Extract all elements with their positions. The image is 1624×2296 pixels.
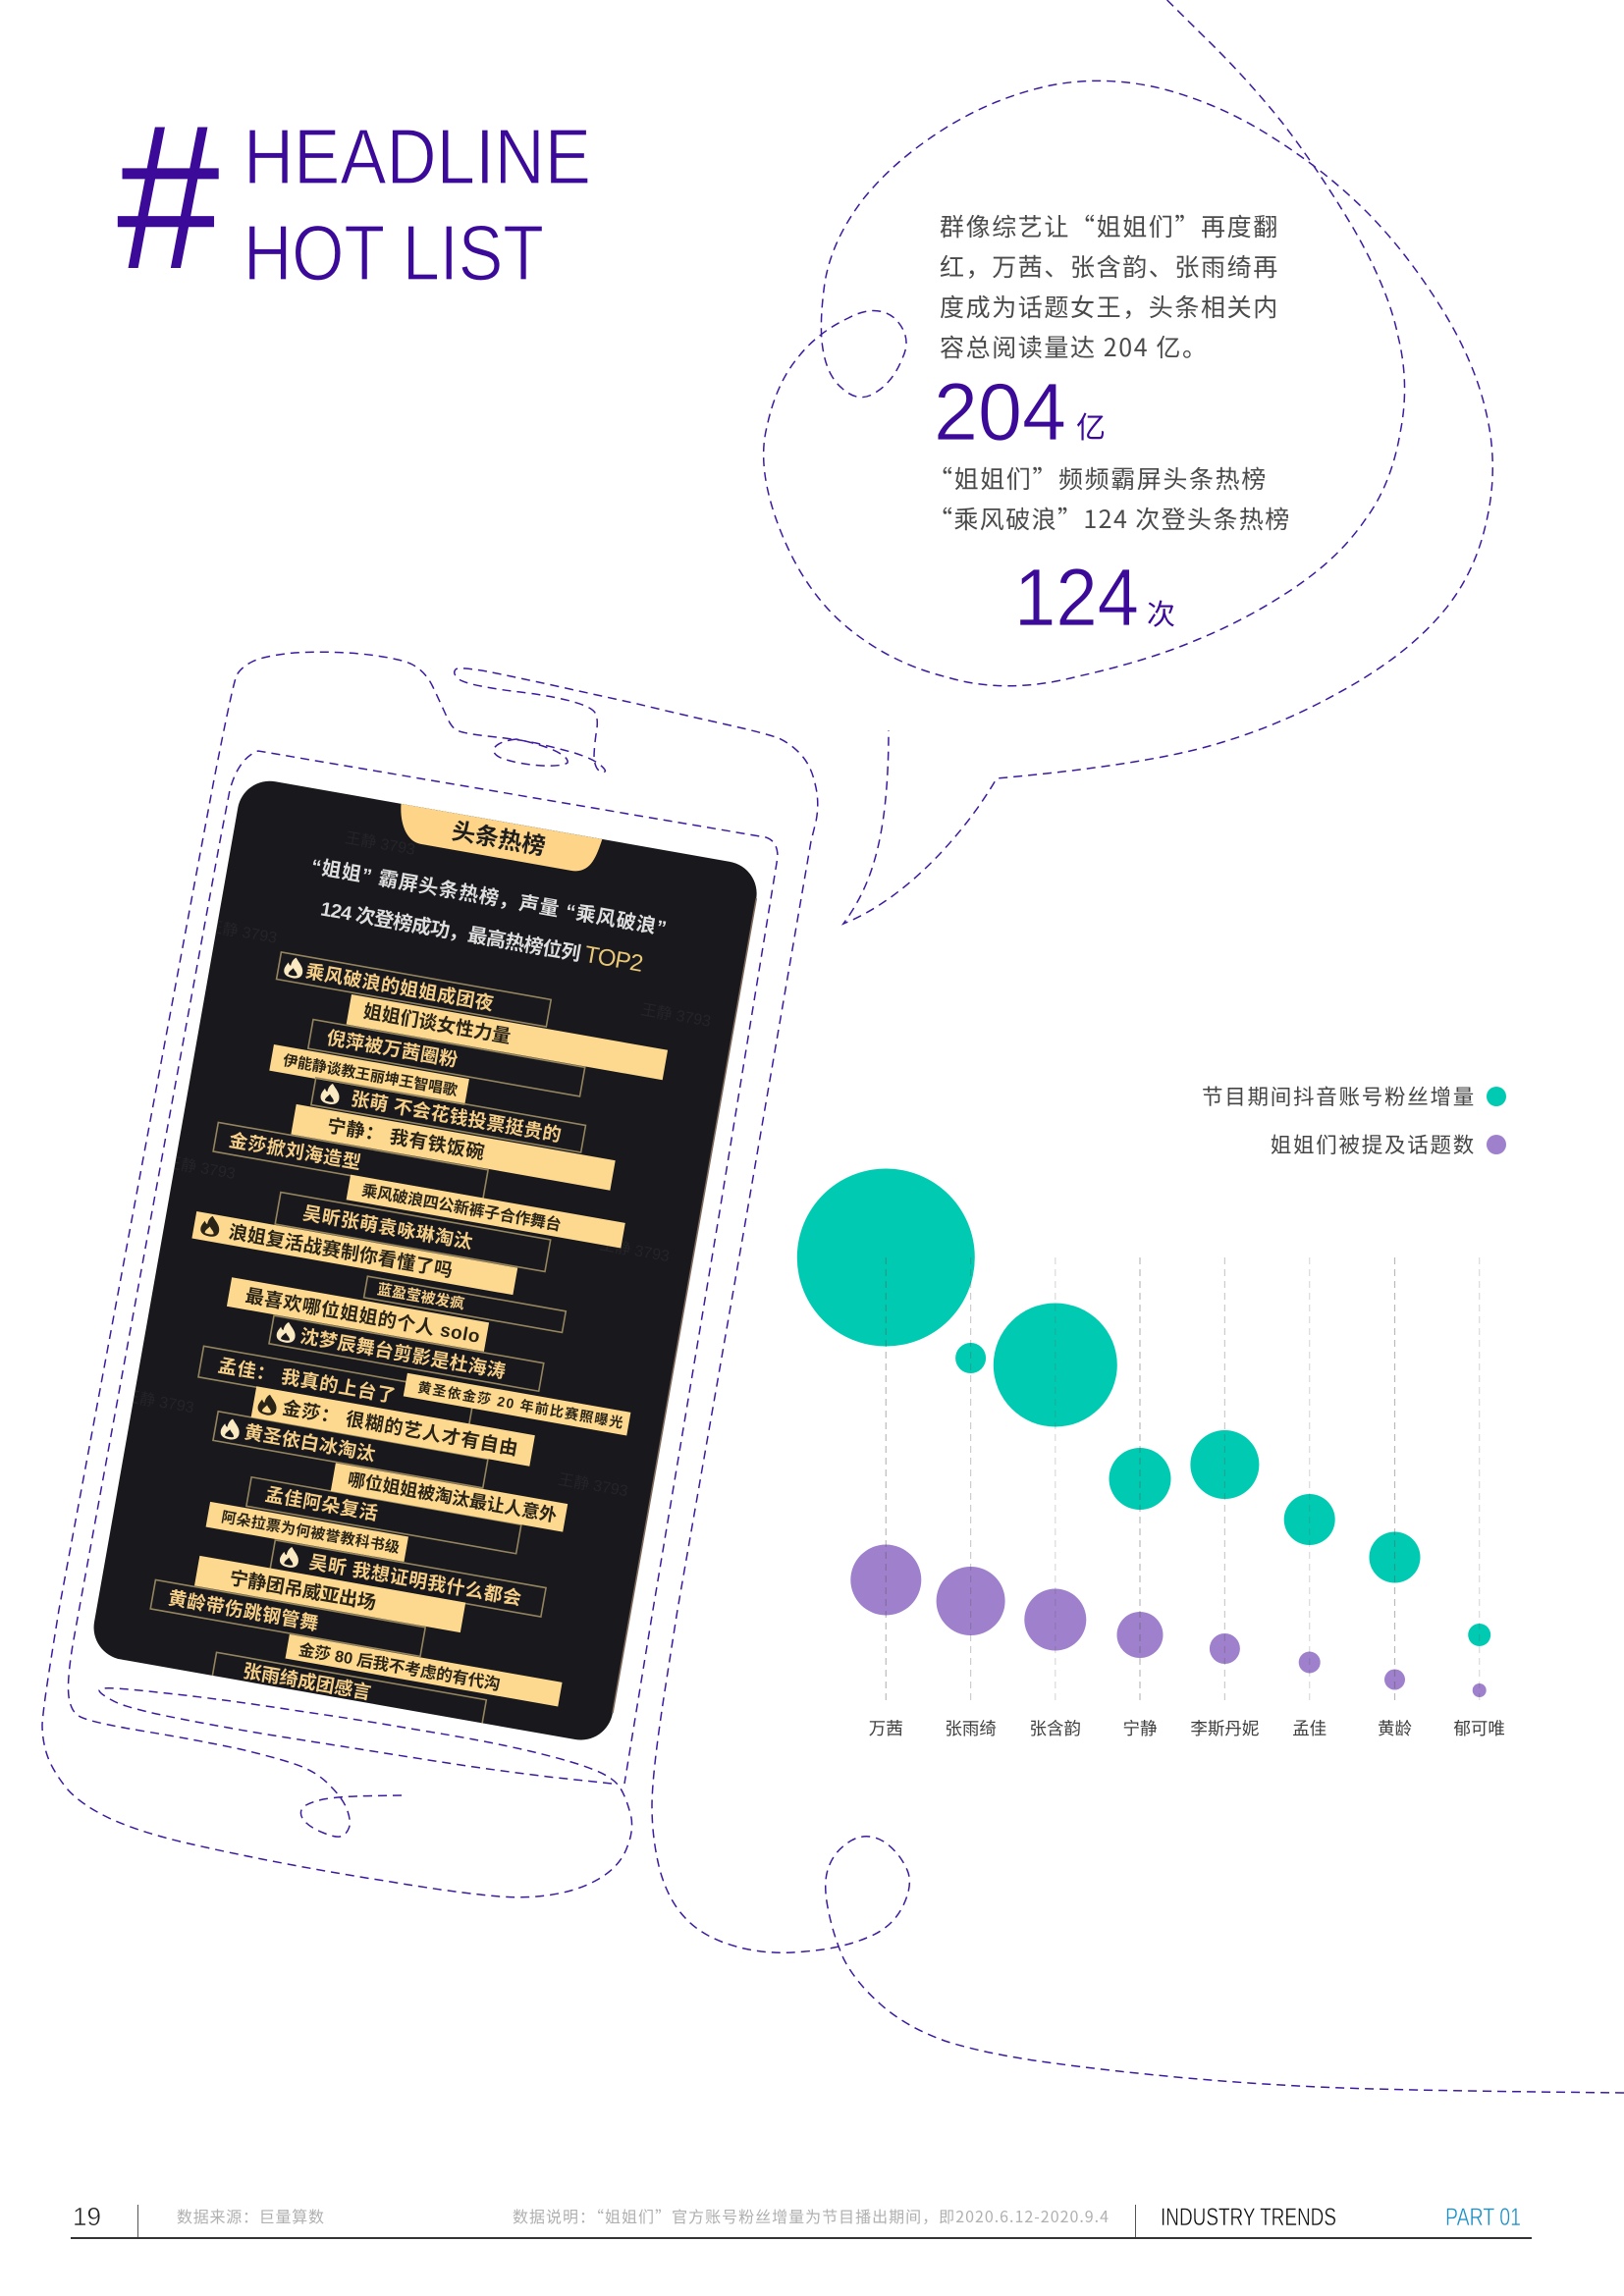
footer: 数据来源：巨量算数 (177, 2204, 324, 2227)
phone screen: headline hot list screenshot (77, 774, 762, 1761)
phone screen: headline hot list screenshot: 王静 3793 (205, 918, 278, 947)
hot list items: 金莎： 很糊的艺人才有自由 (281, 1396, 519, 1460)
phone screen: headline hot list screenshot: 王静 3793 (344, 829, 416, 859)
phone inner dashed outline (69, 751, 778, 1837)
hot list items: 阿朵拉票为何被誉教科书级 (220, 1508, 401, 1557)
footer (71, 2202, 1532, 2239)
text block: intro (940, 208, 1279, 364)
phone screen: headline hot list screenshot: 王静 3793 (598, 1236, 671, 1265)
text block: intro: 度成为话题女王，头条相关内 (940, 289, 1279, 324)
hot list items: 姐姐们谈女性力量 (361, 1000, 513, 1048)
phone speaker dashed loop (494, 739, 568, 766)
tab: 头条热榜 (395, 804, 602, 875)
hot list items (149, 951, 668, 1724)
hot list items: 吴昕张萌袁咏琳淘汰 (301, 1202, 474, 1254)
footer: INDUSTRY TRENDS (1161, 2204, 1336, 2231)
subtitle: “姐姐” 霸屏头条热榜，声量 “乘风破浪” (309, 854, 669, 939)
hot list items: 黄圣依金莎 20 年前比赛照曝光 (416, 1379, 624, 1430)
name labels: 宁静 (1123, 1716, 1157, 1740)
name labels: 孟佳 (1292, 1716, 1326, 1740)
hot list items: 哪位姐姐被淘汰最让人意外 (346, 1468, 559, 1525)
stat: 204 亿: 204 (934, 366, 1066, 457)
stat: 124 次: 次 (1147, 592, 1175, 633)
name labels: 张雨绮 (945, 1716, 997, 1740)
phone screen: headline hot list screenshot: 王静 3793 (639, 1001, 712, 1031)
tab: 头条热榜: 头条热榜 (450, 818, 547, 861)
name labels (869, 1716, 1505, 1740)
hot list items: 宁静： 我有铁饭碗 (326, 1114, 486, 1164)
hot list items: 张萌 不会花钱投票挺贵的 (350, 1089, 563, 1147)
hot list items: 金莎 80 后我不考虑的有代沟 (298, 1639, 502, 1694)
hot list items: 乘风破浪的姐姐成团夜 (303, 960, 496, 1015)
title: HEADLINE HOT LIST (244, 113, 591, 296)
phone screen: headline hot list screenshot: 王静 3793 (557, 1470, 629, 1500)
phone screen: headline hot list screenshot: 王静 3793 (123, 1387, 195, 1416)
hot list items: 沈梦辰舞台剪影是杜海涛 (298, 1324, 508, 1383)
hot list items: 吴昕 我想证明我什么都会 (307, 1551, 523, 1610)
footer: 数据说明：“姐姐们”官方账号粉丝增量为节目播出期间，即2020.6.12-2020.9.4 (513, 2204, 1109, 2227)
hot list items: 金莎掀刘海造型 (227, 1129, 362, 1174)
phone screen: headline hot list screenshot: 王静 3793 (164, 1153, 237, 1183)
text block: intro: 容总阅读量达 204 亿。 (940, 329, 1209, 364)
hot list items: 倪萍被万茜圈粉 (325, 1026, 460, 1072)
hot list items: 伊能静谈教王丽坤王智唱歌 (282, 1051, 459, 1099)
legend: 节目期间抖音账号粉丝增量 (1202, 1081, 1476, 1111)
name labels: 黄龄 (1378, 1716, 1412, 1740)
title: HEADLINE HOT LIST: HOT LIST (244, 209, 544, 296)
name labels: 郁可唯 (1453, 1716, 1505, 1740)
hot list items: 乘风破浪四公新裤子合作舞台 (360, 1181, 563, 1234)
hot list items: 宁静团吊威亚出场 (228, 1567, 378, 1615)
teal bubbles: 抖音账号粉丝增量 (797, 1168, 1490, 1646)
text block: hot list (928, 460, 1291, 536)
name labels: 万茜 (869, 1716, 903, 1740)
name labels: 李斯丹妮 (1190, 1716, 1259, 1740)
hot list items: 蓝盈莹被发疯 (376, 1280, 466, 1313)
purple bubbles: 被提及话题数 (850, 1545, 1487, 1697)
text block: intro: 红，万茜、张含韵、张雨绮再 (940, 248, 1279, 284)
hot list items: 黄圣依白冰淘汰 (243, 1421, 377, 1466)
bubble chart (797, 1168, 1505, 1740)
footer: 19 (73, 2202, 101, 2231)
text block: hot list: “乘风破浪”124 次登头条热榜 (928, 501, 1291, 536)
title: HEADLINE HOT LIST: HEADLINE (244, 113, 591, 200)
hot list items: 浪姐复活战赛制你看懂了吗 (227, 1220, 455, 1282)
title: hash symbol: # (117, 83, 220, 312)
name labels: 张含韵 (1030, 1716, 1081, 1740)
stat: 124 次: 124 (1014, 552, 1139, 643)
legend: 姐姐们被提及话题数 (1271, 1129, 1476, 1159)
text block: intro: 群像综艺让“姐姐们”再度翻 (940, 208, 1279, 243)
hot list items: 黄龄带伤跳钢管舞 (167, 1586, 320, 1635)
subtitle: 124 次登榜成功，最高热榜位列 TOP2 (319, 894, 645, 978)
hot list items: 孟佳： 我真的上台了 (216, 1354, 398, 1408)
phone outer dashed outline (42, 652, 1624, 2093)
legend (1202, 1081, 1506, 1159)
hot list items: 张雨绮成团感言 (242, 1659, 373, 1704)
hot list items: 最喜欢哪位姐姐的个人 solo (244, 1284, 482, 1348)
speech bubble dashed outline (764, 0, 1492, 924)
text block: hot list: “姐姐们”频频霸屏头条热榜 (928, 460, 1268, 496)
footer: PART 01 (1445, 2204, 1521, 2231)
stat: 204 亿: 亿 (1076, 403, 1106, 447)
hot list items: 孟佳阿朵复活 (263, 1484, 379, 1524)
